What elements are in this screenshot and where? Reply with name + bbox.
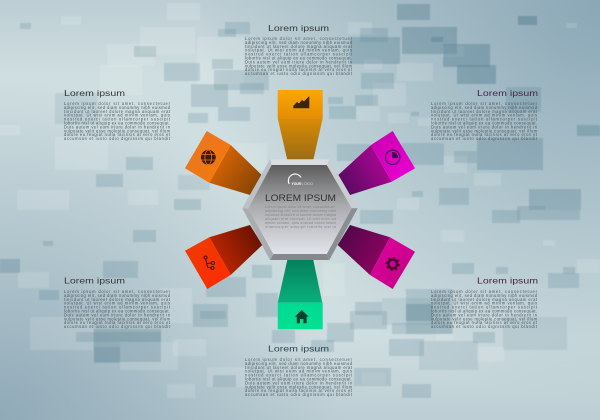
body text: adipiscing elit, sed diam nonummy nibh euismod [245,361,353,366]
body text: vulputate velit esse molestie consequat, vel illum [64,128,171,133]
body text: accumsan et iusto odio dignissim qui blandit [64,136,171,141]
body text [245,357,353,397]
body text: tincidunt ut laoreet dolore magna aliquam erat [245,365,353,370]
body text: vulputate velit esse molestie consequat, vel illum [431,128,538,133]
body text: volutpat. Ut wisi enim ad minim veniam, quis [245,369,352,374]
body text [64,289,171,329]
body text: tincidunt ut laoreet dolore magna aliquam erat [431,109,538,114]
body text: lobortis nisl ut aliquip ex ea commodo consequat. [431,308,537,314]
body text: dolore eu feugiat nulla facilisis at vero eros et [245,388,353,393]
arm: top orange with chart icon [278,90,323,160]
body text: Duis autem vel eum iriure dolor in hendrerit in [64,124,171,129]
body text: vulputate velit esse molestie consequat, vel illum [431,316,538,321]
heading: Lorem ipsum [64,276,125,286]
body text: Duis autem vel eum iriure dolor in hendrerit in [245,380,353,385]
icon: network nodes [204,256,214,270]
body text: tincidunt ut laoreet dolore magna aliquam erat [64,297,171,302]
hexagon heading: LOREM IPSUM [265,192,336,203]
body text: Duis autem vel eum iriure dolor in hendrerit in [431,124,538,129]
body text: dolore eu feugiat nulla facilisis at vero eros et [64,132,171,137]
text block: bottom center [245,344,353,397]
arm: bottom green with home icon [278,260,323,329]
body text: adipiscing elit, sed diam nonummy nibh euismod [431,105,538,110]
body text: dolore eu feugiat nulla facilisis at vero eros et [245,67,353,72]
heading: Lorem ipsum [64,89,125,98]
body text: lobortis nisl ut aliquip ex ea commodo consequat. [64,120,170,126]
icon: home [295,310,309,323]
body text: Lorem ipsum dolor sit amet, consectetuer [245,36,353,41]
body text: dolore eu feugiat nulla facilisis at vero eros et [64,320,171,325]
body text: Duis autem vel eum iriure dolor in hendrerit in [245,59,353,64]
text block: upper left [64,89,171,141]
body text: vulputate velit esse molestie consequat, vel illum [245,384,353,389]
logo: YOUR [292,182,302,186]
body text: volutpat. Ut wisi enim ad minim veniam, quis [431,113,537,118]
arm: lower left red with network icon [185,225,262,289]
text block: top center [245,24,353,76]
body text [431,289,538,329]
body text: accumsan et iusto odio dignissim qui blandit [431,324,538,329]
body text: tincidunt ut laoreet dolore magna aliquam erat [245,44,353,49]
body text [431,101,538,141]
body text: volutpat. Ut wisi enim ad minim veniam, quis [64,113,170,118]
heading: Lorem ipsum [477,89,538,98]
arm: lower right purple with gear icon [338,225,415,289]
body text: lobortis nisl ut aliquip ex ea commodo consequat. [64,308,170,314]
hexagon bevel [242,159,358,260]
body text: nostrud exerci tation ullamcorper suscipit [64,117,171,122]
body text: accumsan et iusto odio dignissim qui blandit [245,71,353,76]
hexagon body text: Lorem ipsum dolor sit amet, consectetuer [265,205,336,209]
hexagon body text: minim veniam, quis nostrud exerci tation [265,221,336,225]
body text: lobortis nisl ut aliquip ex ea commodo consequat. [245,56,352,60]
body text: tincidunt ut laoreet dolore magna aliquam erat [64,109,171,114]
logo [288,174,313,186]
hexagon body text: aliquam erat volutpat. Ut wisi enim ad [265,217,336,221]
body text: nostrud exerci tation ullamcorper suscipit [64,305,171,310]
body text: volutpat. Ut wisi enim ad minim veniam, quis [64,301,170,306]
text block: lower left [64,276,171,329]
body text: adipiscing elit, sed diam nonummy nibh euismod [64,105,171,110]
hexagon body text: euismod tincidunt ut laoreet dolore magna [265,213,337,217]
icon: pie chart [386,150,400,164]
hexagon face [248,165,352,254]
body text: accumsan et iusto odio dignissim qui blandit [64,324,171,329]
body text: dolore eu feugiat nulla facilisis at vero eros et [431,320,538,325]
body text [64,101,171,141]
body text: Duis autem vel eum iriure dolor in hendrerit in [64,312,171,317]
body text: nostrud exerci tation ullamcorper suscipit [431,117,538,122]
icon: gear [386,258,399,270]
body text: Lorem ipsum dolor sit amet, consectetuer [431,101,538,106]
body text: lobortis nisl ut aliquip ex ea commodo consequat. [431,120,537,126]
body text: accumsan et iusto odio dignissim qui blandit [431,136,538,141]
arm: upper right magenta with pie icon [338,131,415,195]
body text: Lorem ipsum dolor sit amet, consectetuer [64,289,171,294]
body text: adipiscing elit, sed diam nonummy nibh euismod [64,293,171,298]
icon: area chart [293,96,309,108]
body text: volutpat. Ut wisi enim ad minim veniam, quis [431,301,537,306]
text block: lower right [431,276,538,329]
hexagon body text: adipiscing elit, sed diam nonummy nibh [265,209,336,213]
arm: upper left orange with globe icon [185,131,262,195]
body text [245,36,353,76]
heading: Lorem ipsum [268,344,329,354]
central hexagon panel [242,159,358,260]
body text: Duis autem vel eum iriure dolor in hendrerit in [431,312,538,317]
text block: upper right [431,89,538,141]
body text: Lorem ipsum dolor sit amet, consectetuer [245,357,353,362]
hexagon body text: ullamcorper suscipit lobortis nisl ut [265,225,337,229]
body text: volutpat. Ut wisi enim ad minim veniam, quis [245,48,352,53]
body text: Lorem ipsum dolor sit amet, consectetuer [64,101,171,106]
hexagon body text [265,205,337,229]
body text: vulputate velit esse molestie consequat, vel illum [245,63,353,68]
body text: tincidunt ut laoreet dolore magna aliquam erat [431,297,538,302]
body text: vulputate velit esse molestie consequat, vel illum [64,316,171,321]
body text: lobortis nisl ut aliquip ex ea commodo consequat. [245,376,352,382]
body text: accumsan et iusto odio dignissim qui blandit [245,392,353,397]
body text: adipiscing elit, sed diam nonummy nibh euismod [431,293,538,298]
body text: nostrud exerci tation ullamcorper suscipit [431,305,538,310]
body text: nostrud exerci tation ullamcorper suscipit [245,52,353,57]
heading: Lorem ipsum [477,276,538,286]
body text: Lorem ipsum dolor sit amet, consectetuer [431,289,538,294]
body text: dolore eu feugiat nulla facilisis at vero eros et [431,132,538,137]
body text: nostrud exerci tation ullamcorper suscipit [245,373,353,378]
body text: adipiscing elit, sed diam nonummy nibh euismod [245,40,353,45]
icon: globe [201,150,216,165]
heading: Lorem ipsum [268,24,329,33]
logo: LOGO [302,182,313,186]
